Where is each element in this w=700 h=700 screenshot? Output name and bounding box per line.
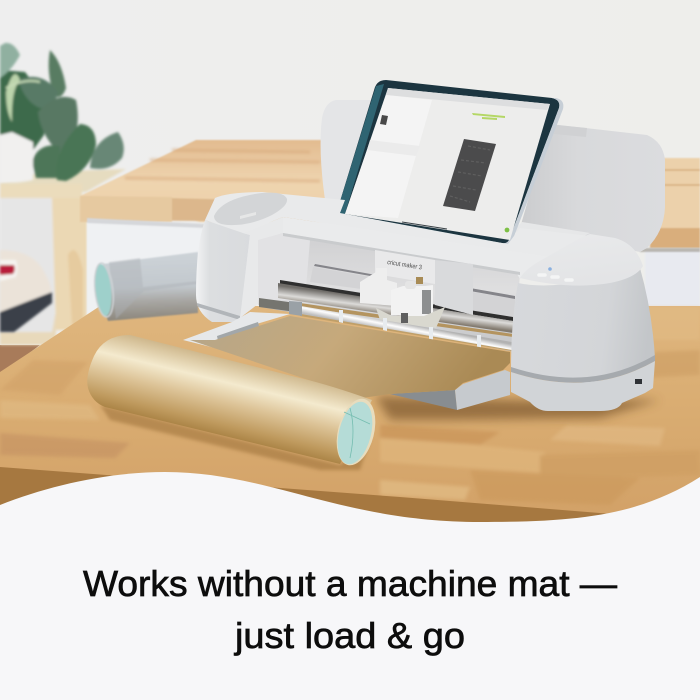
headline line 1: Works without a machine mat — [83, 563, 617, 604]
wall background [0, 0, 700, 350]
tablet dock deck [205, 192, 590, 258]
pod upper shell [511, 268, 655, 384]
cavity [258, 232, 520, 352]
tablet [338, 80, 563, 244]
clamp A [360, 268, 397, 306]
back desk [80, 140, 700, 248]
roll end cardboard core [332, 398, 378, 468]
tablet silver edge [502, 98, 563, 244]
brass detail [416, 277, 423, 284]
cup holder inner [240, 212, 256, 219]
pod top face [520, 234, 643, 286]
right pod [511, 234, 655, 411]
pattern on preview [450, 146, 490, 202]
left lid arm [321, 100, 378, 200]
carriage top panel [375, 250, 435, 284]
headline line 2: just load & go [234, 615, 465, 656]
plant [0, 43, 124, 183]
right lid panel [520, 124, 665, 252]
white wave panel [0, 472, 700, 700]
control buttons [539, 275, 572, 280]
machine lid [321, 100, 665, 252]
home indicator [402, 222, 447, 229]
pod base [511, 361, 655, 411]
clamp side detail [422, 290, 431, 314]
back rail [278, 283, 513, 333]
table shadow under machine [375, 396, 660, 420]
continue button [505, 228, 509, 232]
back rail shadow [280, 280, 513, 321]
back slots [310, 267, 376, 291]
rail end dark [259, 298, 296, 312]
silver vinyl roll [92, 252, 198, 321]
gold roll shadow [100, 405, 370, 470]
carriage [360, 250, 473, 328]
tablet teal left bezel [338, 84, 502, 243]
rubber collar [289, 301, 302, 316]
iron press on lower shelf [0, 250, 52, 332]
app top bar [386, 88, 550, 110]
rail gold reflection [300, 303, 513, 337]
front rim [283, 217, 555, 279]
lid slit [554, 125, 587, 137]
foreground wooden table [0, 306, 700, 520]
cup holder [214, 193, 287, 225]
inner left wall [240, 217, 283, 318]
table wood planks [0, 307, 700, 505]
left wing front [196, 220, 250, 322]
power led [548, 267, 552, 271]
clamp B [391, 285, 433, 318]
machine main body [196, 192, 590, 352]
mini thumbnail [380, 115, 388, 125]
usb port [635, 379, 642, 384]
tray grey strip [217, 322, 259, 341]
gold vinyl sheet [190, 316, 510, 398]
tablet screen [345, 88, 550, 240]
core markings [344, 408, 370, 458]
table front edge [0, 467, 612, 540]
cavity left shade [258, 233, 310, 300]
carriage logo: cricut maker 3 [387, 259, 423, 272]
white cabinet under desk [87, 218, 700, 320]
lid stand shelf [512, 222, 590, 238]
roll end rim [330, 395, 382, 469]
layer row [367, 140, 420, 156]
blade housing knob [405, 281, 416, 289]
carriage rear panel [435, 260, 473, 315]
paper tray right [390, 370, 510, 410]
paper tray left [183, 312, 290, 348]
left shelf unit [0, 169, 126, 345]
clamp foot [376, 307, 445, 328]
gold vinyl roll [87, 335, 382, 469]
left wing band [197, 303, 240, 320]
design preview panel [443, 139, 496, 211]
clamp foot dark [401, 313, 408, 323]
app left panel [345, 95, 432, 218]
rim lower edge [283, 233, 520, 275]
headline [83, 563, 617, 656]
front rail [260, 299, 512, 350]
front rail gold reflection [300, 312, 512, 351]
pod band [511, 355, 655, 383]
floor behind table [0, 345, 40, 375]
rail clips [339, 310, 481, 349]
app green status [472, 113, 505, 120]
